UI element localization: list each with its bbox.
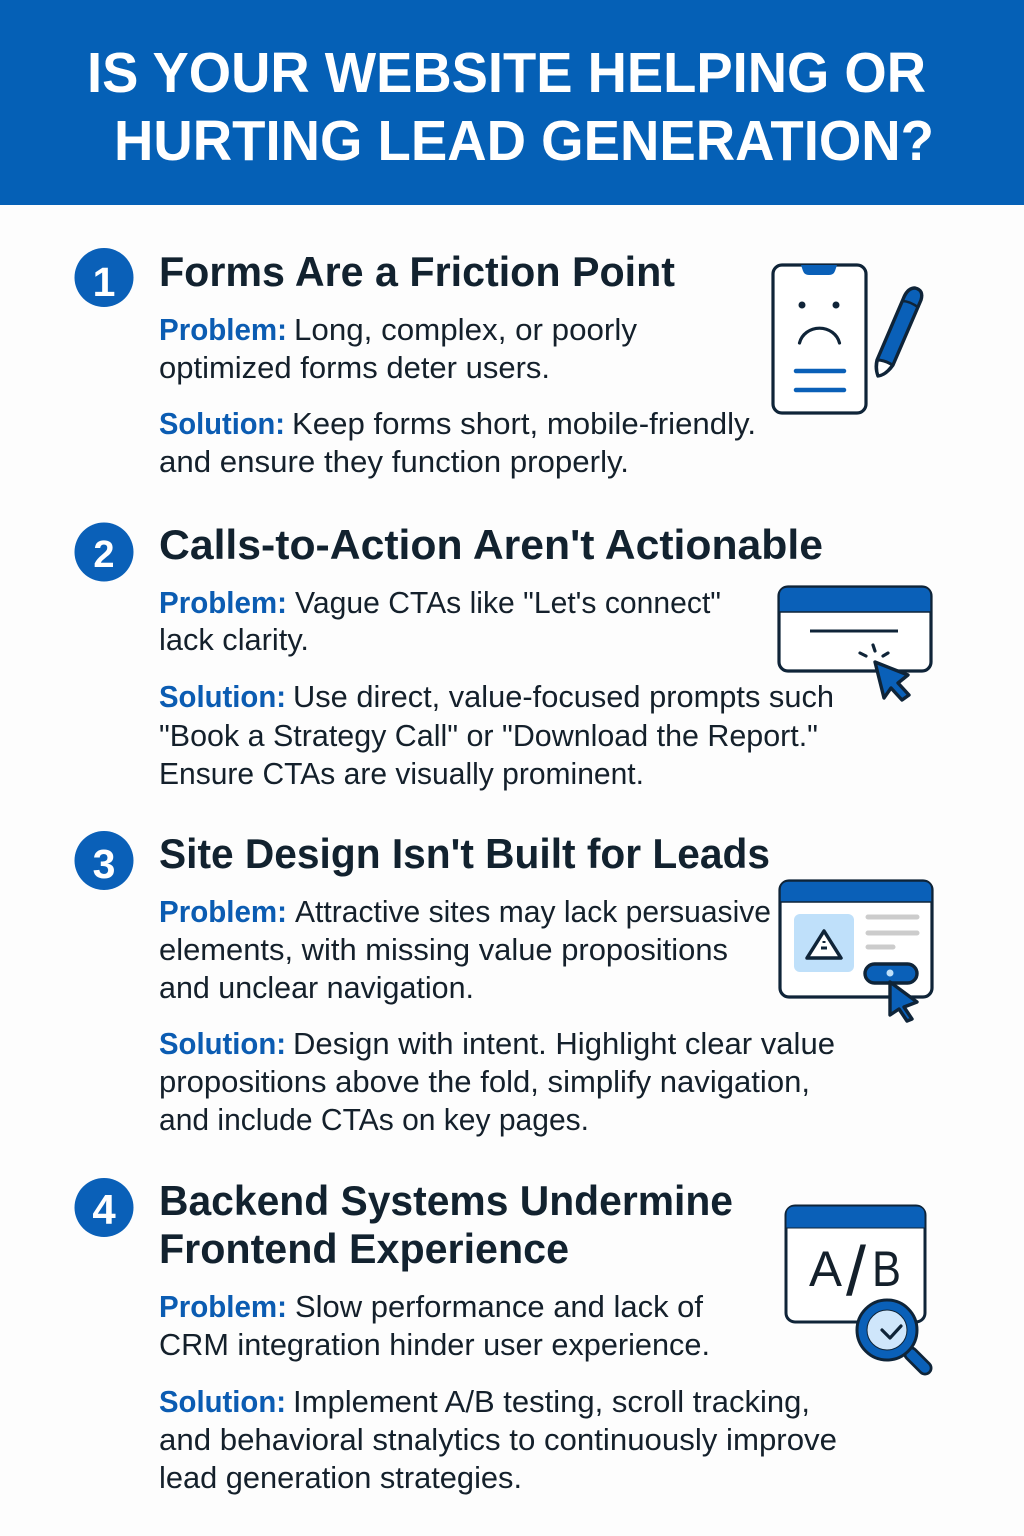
- solution text 3: propositions above the fold, simplify navigation,: [159, 1064, 810, 1099]
- icon: A/B test window with magnifier: A: [809, 1241, 843, 1297]
- heading 4: Frontend Experience: [159, 1225, 569, 1272]
- problem text 3: elements, with missing value propositions: [159, 932, 728, 967]
- problem text 1: optimized forms deter users.: [159, 350, 550, 385]
- problem text 2: Vague CTAs like "Let's connect": [295, 585, 721, 620]
- solution text 3: and include CTAs on key pages.: [159, 1102, 589, 1137]
- solution text 2: Ensure CTAs are visually prominent.: [159, 756, 644, 791]
- problem text 4: Slow performance and lack of: [295, 1289, 703, 1324]
- icon: A/B test window with magnifier: /: [846, 1232, 867, 1310]
- problem text 4: [159, 1289, 710, 1362]
- icon: A/B test window with magnifier: [786, 1206, 925, 1368]
- number badge 1: [74, 248, 134, 307]
- number badge 1: 1: [93, 259, 115, 305]
- problem text 1: Problem:: [159, 312, 287, 347]
- panel: section 2 calls to action: [74, 521, 931, 791]
- solution text 3: [159, 1026, 835, 1137]
- number badge 4: [74, 1178, 134, 1237]
- solution text 3: Solution:: [159, 1026, 286, 1061]
- solution text 3: Design with intent. Highlight clear value: [293, 1026, 835, 1061]
- heading 2: Calls-to-Action Aren't Actionable: [159, 521, 823, 568]
- panel: section 1 forms: [74, 248, 922, 479]
- problem text 1: Long, complex, or poorly: [294, 312, 637, 347]
- icon: web page with warning and button cursor: [780, 881, 932, 1021]
- header banner with title: [0, 0, 1024, 205]
- solution text 1: and ensure they function properly.: [159, 444, 629, 479]
- problem text 2: lack clarity.: [159, 622, 309, 657]
- solution text 4: Solution:: [159, 1384, 286, 1419]
- solution text 4: and behavioral stnalytics to continuously improve: [159, 1422, 837, 1457]
- solution text 2: Solution:: [159, 679, 286, 714]
- problem text 3: and unclear navigation.: [159, 970, 474, 1005]
- icon: call to action card with cursor: [779, 587, 931, 700]
- problem text 3: [159, 894, 771, 1005]
- header banner with title: HURTING LEAD GENERATION?: [114, 109, 934, 173]
- heading 1: Forms Are a Friction Point: [159, 248, 675, 295]
- panel: section 4 backend systems: [74, 1177, 925, 1495]
- problem text 1: [159, 312, 637, 385]
- solution text 1: [159, 406, 756, 479]
- number badge 3: [74, 831, 134, 890]
- solution text 4: [159, 1384, 837, 1495]
- solution text 2: "Book a Strategy Call" or "Download the Report.": [159, 718, 818, 753]
- icon: sad phone form and pencil: [773, 265, 922, 413]
- problem text 2: [159, 585, 721, 657]
- problem text 3: Problem:: [159, 894, 287, 929]
- header banner with title: IS YOUR WEBSITE HELPING OR: [87, 41, 926, 105]
- number badge 2: 2: [93, 534, 115, 576]
- number badge 4: 4: [92, 1186, 116, 1233]
- problem text 3: Attractive sites may lack persuasive: [295, 894, 771, 929]
- number badge 2: [74, 522, 134, 582]
- icon: A/B test window with magnifier: B: [872, 1241, 901, 1297]
- problem text 4: CRM integration hinder user experience.: [159, 1327, 710, 1362]
- problem text 2: Problem:: [159, 585, 287, 620]
- heading 4: Backend Systems Undermine: [159, 1177, 733, 1224]
- heading 3: Site Design Isn't Built for Leads: [159, 830, 770, 877]
- problem text 4: Problem:: [159, 1289, 287, 1324]
- solution text 4: Implement A/B testing, scroll tracking,: [293, 1384, 810, 1419]
- solution text 4: lead generation strategies.: [159, 1460, 522, 1495]
- solution text 2: Use direct, value-focused prompts such: [293, 679, 834, 714]
- solution text 1: Solution:: [159, 406, 285, 441]
- panel: section 3 site design: [74, 830, 932, 1137]
- solution text 2: [159, 679, 834, 791]
- heading 4: [159, 1177, 733, 1272]
- number badge 3: 3: [93, 841, 115, 887]
- solution text 1: Keep forms short, mobile-friendly.: [292, 406, 756, 441]
